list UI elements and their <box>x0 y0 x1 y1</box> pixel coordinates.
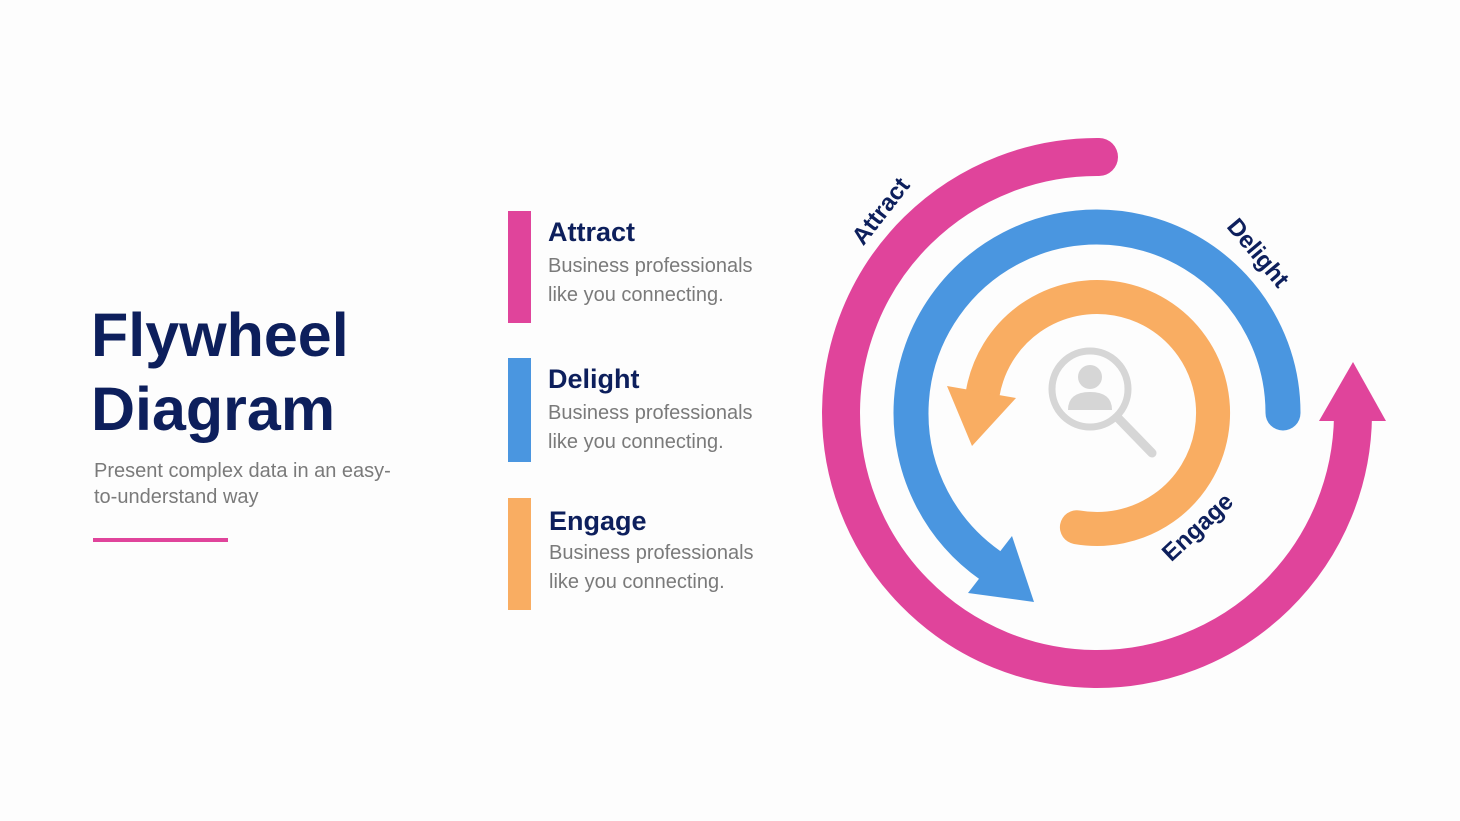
title: Flywheel <box>91 301 349 369</box>
item: Engage <box>508 498 754 610</box>
orange ring arrow <box>947 297 1213 529</box>
item: Engage: Engage <box>549 506 647 536</box>
accent line <box>93 538 228 542</box>
icon: user magnifier <box>1052 351 1152 453</box>
item: Delight: like you connecting. <box>548 431 724 453</box>
pink ring arrow <box>841 157 1386 669</box>
item: Attract: like you connecting. <box>548 284 724 306</box>
label: Attract: Attract <box>847 173 916 250</box>
item: Delight: Delight <box>548 364 640 394</box>
item: Delight <box>508 358 753 462</box>
blue ring arrow <box>911 227 1283 602</box>
item: Attract <box>508 211 753 323</box>
item: Attract: Attract <box>548 217 635 247</box>
item: Delight: Business professionals <box>548 402 753 424</box>
subtitle: Present complex data in an easy- <box>94 460 391 482</box>
item: Engage: Business professionals <box>549 542 754 564</box>
title: Diagram <box>91 375 335 443</box>
subtitle <box>94 460 391 508</box>
label: Engage: Engage <box>1157 488 1239 567</box>
label: Delight: Delight <box>1221 213 1294 293</box>
item: Engage: like you connecting. <box>549 571 725 593</box>
item: Attract: Business professionals <box>548 255 753 277</box>
title <box>91 301 349 443</box>
subtitle: to-understand way <box>94 486 259 508</box>
